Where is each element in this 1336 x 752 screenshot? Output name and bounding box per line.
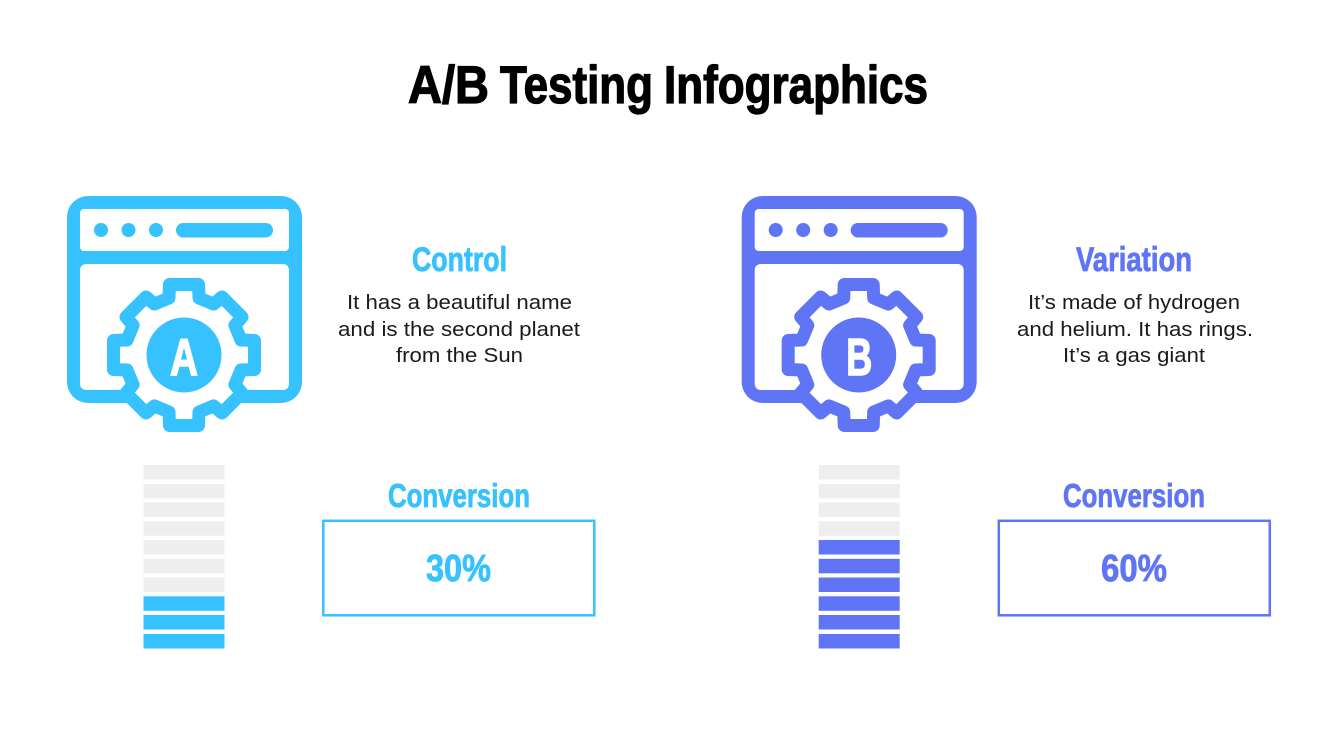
callout: 60% value box (999, 521, 1270, 615)
text block: variation description (1017, 292, 1253, 367)
icon: browser window with gear B (742, 196, 977, 426)
title: Infographics (664, 56, 928, 115)
heading: variation: Variation (1076, 241, 1192, 279)
callout: 30% value box (323, 521, 594, 615)
text block: variation description: and helium. It has rings. (1017, 319, 1253, 341)
callout: 30% value box: 30% (426, 548, 491, 590)
icon: browser window with gear B: B (846, 329, 872, 387)
text block: control description: from the Sun (396, 345, 523, 367)
icon: browser window with gear A: A (170, 329, 198, 387)
panel: control (67, 196, 594, 648)
heading: control: Control (412, 241, 507, 279)
bar chart: 60% conversion (819, 465, 900, 648)
text block: variation description: It’s made of hydrogen (1028, 292, 1240, 314)
icon: browser window with gear A (67, 196, 302, 426)
text block: variation description: It’s a gas giant (1063, 345, 1205, 367)
title: Testing (500, 56, 653, 115)
heading: conversion B: Conversion (1063, 477, 1205, 514)
title: A/B (408, 56, 489, 115)
text block: control description: It has a beautiful name (347, 292, 572, 314)
panel: variation (742, 196, 1270, 648)
heading: conversion A: Conversion (388, 477, 530, 514)
text block: control description (338, 292, 580, 367)
text block: control description: and is the second planet (338, 319, 580, 341)
callout: 60% value box: 60% (1101, 548, 1167, 590)
bar chart: 30% conversion (144, 465, 224, 648)
title (408, 56, 928, 115)
